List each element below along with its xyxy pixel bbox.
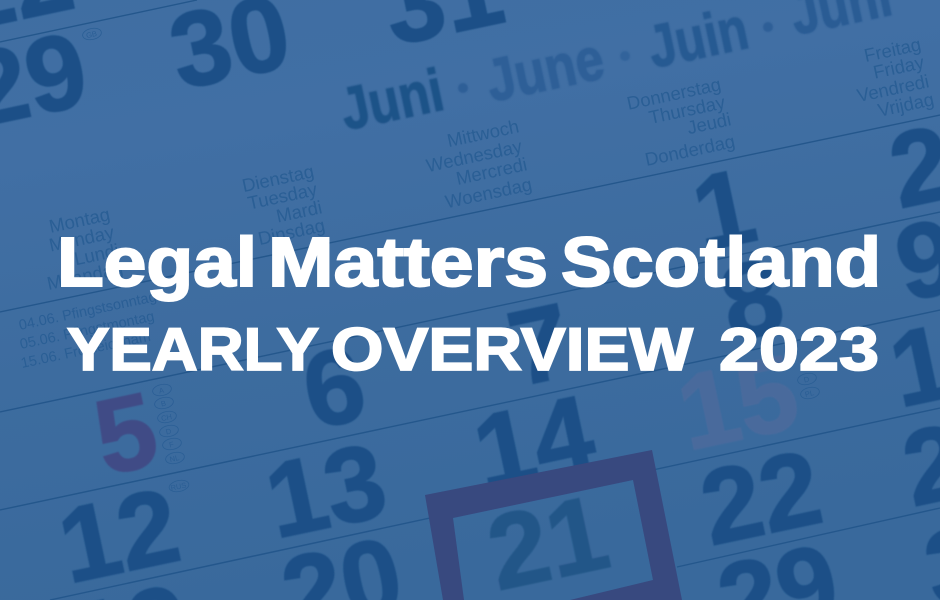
title xyxy=(57,223,881,383)
calendar holiday notes: 15.06. Fronleichnam xyxy=(20,329,152,372)
calendar weekday labels: Thursday xyxy=(647,91,728,128)
calendar weekday labels: Dienstag xyxy=(240,160,316,196)
calendar weekday labels: Monday xyxy=(47,221,117,256)
subheading: Yearly Overview 2023: 2023 xyxy=(719,316,879,383)
calendar holiday notes: 04.06. Pfingstsonntag xyxy=(18,289,158,334)
calendar holiday notes xyxy=(18,289,158,372)
calendar country badges: D xyxy=(803,374,811,385)
heading: Legal Matters Scotland: Legal xyxy=(57,223,257,301)
calendar country badges: A xyxy=(158,386,165,395)
calendar country badges: B xyxy=(160,399,167,408)
calendar large day numbers: 1 xyxy=(683,146,765,274)
calendar holiday notes: 05.06. Pfingstmontag xyxy=(19,309,156,353)
calendar weekday labels: Mittwoch xyxy=(445,115,521,151)
calendar weekday labels: Mercredi xyxy=(454,153,529,189)
calendar large day numbers: 22 xyxy=(691,428,831,568)
calendar weekday labels: Montag xyxy=(47,203,112,237)
calendar weekday labels: Donnerstag xyxy=(625,73,723,114)
calendar country badges: GB xyxy=(85,29,98,40)
calendar large day numbers: 14 xyxy=(464,373,604,513)
calendar large day numbers: 8 xyxy=(711,236,793,364)
calendar large day numbers: 13 xyxy=(256,421,396,561)
calendar weekday labels: Donderdag xyxy=(643,130,737,170)
calendar month heading: Juni xyxy=(335,56,449,143)
calendar weekday labels: Woensdag xyxy=(443,173,534,212)
calendar weekday labels: Vrijdag xyxy=(876,88,936,121)
calendar country badges: D xyxy=(165,426,173,437)
calendar highlighted date frame xyxy=(425,450,682,600)
calendar weekday labels: Tuesday xyxy=(246,178,320,214)
subheading: Yearly Overview 2023: OVERVIEW xyxy=(331,316,693,383)
calendar weekday labels: Jeudi xyxy=(685,108,733,138)
calendar weekday labels xyxy=(45,33,936,294)
calendar large day numbers: 7 xyxy=(499,281,581,409)
calendar month heading: June xyxy=(480,24,610,115)
calendar country badges xyxy=(82,27,820,493)
heading: Legal Matters Scotland: Matters xyxy=(268,223,548,301)
heading: Legal Matters Scotland: Scotland xyxy=(561,223,881,301)
heading: Legal Matters Scotland xyxy=(57,223,881,301)
calendar weekday labels: Friday xyxy=(871,51,927,83)
calendar country badges: NL xyxy=(169,453,180,464)
calendar country badges: PL xyxy=(804,388,815,399)
subheading: Yearly Overview 2023: YEARLY xyxy=(67,316,319,383)
calendar large day numbers: 6 xyxy=(293,324,375,452)
calendar weekday labels: Lundi xyxy=(72,239,121,269)
calendar weekday labels: Freitag xyxy=(862,33,923,66)
calendar holiday number 5: 5 xyxy=(85,370,167,498)
calendar weekday labels: Wednesday xyxy=(424,135,525,176)
calendar holiday number 15: 15 xyxy=(668,333,808,473)
calendar weekday labels: Mardi xyxy=(274,196,324,227)
calendar weekday labels: Vendredi xyxy=(855,70,931,106)
subheading: Yearly Overview 2023 xyxy=(67,316,879,383)
calendar weekday labels: Dinsdag xyxy=(256,214,327,249)
calendar month heading xyxy=(335,0,897,143)
calendar country badges: F xyxy=(168,440,175,449)
calendar country badges: RUS xyxy=(170,481,187,493)
calendar country badges: CH xyxy=(160,412,173,423)
calendar weekday labels: Maandag xyxy=(45,257,125,294)
